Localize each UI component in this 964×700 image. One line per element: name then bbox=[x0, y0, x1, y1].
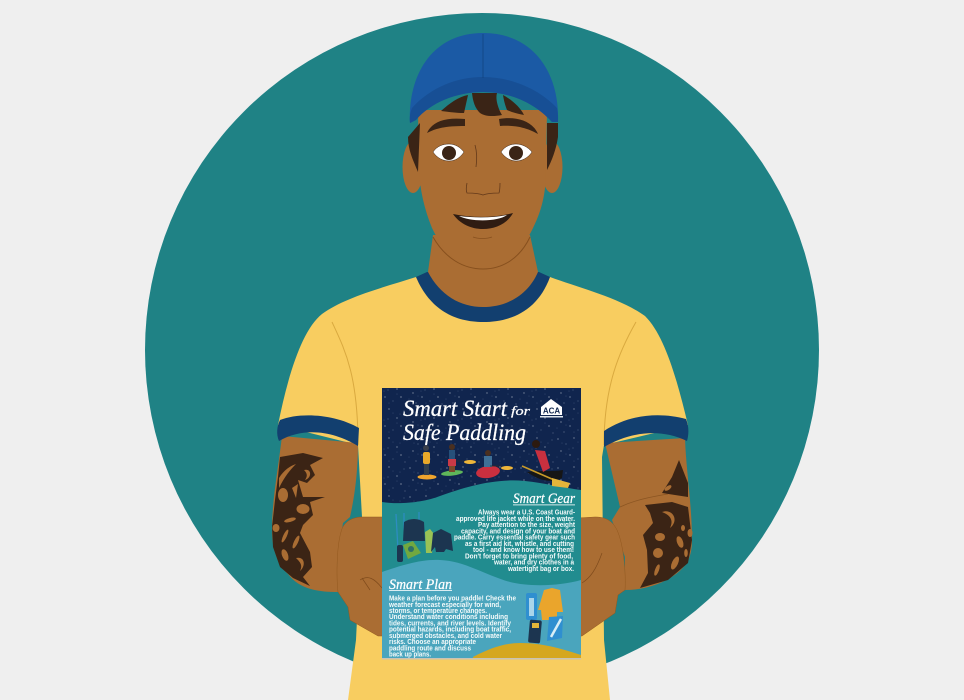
text: smart gear: as a first aid kit, whistle, and cutting bbox=[465, 541, 574, 548]
neck and collar bbox=[416, 235, 550, 322]
text: smart gear bbox=[454, 510, 576, 573]
text: smart plan: risks. Choose an appropriate bbox=[389, 639, 476, 646]
character bbox=[272, 33, 692, 700]
t-shirt bbox=[278, 277, 688, 700]
title: Safe Paddling bbox=[403, 420, 526, 445]
text: smart plan: back up plans. bbox=[389, 652, 431, 659]
smile bbox=[453, 213, 513, 238]
gear illustration bbox=[396, 512, 453, 562]
text: smart plan: Understand water conditions including bbox=[389, 614, 508, 621]
ACA logo bbox=[540, 399, 563, 418]
text: smart gear: Don't forget to bring plenty of food, bbox=[465, 553, 573, 560]
text: smart plan: submerged obstacles, and cold water bbox=[389, 633, 502, 640]
teal gear section bbox=[382, 480, 581, 590]
eyebrows bbox=[427, 118, 538, 134]
text: smart gear: approved life jacket while on the water. bbox=[456, 516, 575, 523]
text: smart plan bbox=[388, 596, 516, 659]
paddler: yellow board bbox=[418, 445, 436, 480]
text: smart plan: Make a plan before you paddle! Check the bbox=[389, 596, 516, 602]
blue plan section bbox=[382, 560, 581, 658]
text: smart plan: tides, currents, and river levels. Identify bbox=[389, 620, 511, 627]
nose bbox=[466, 145, 500, 195]
paddler: red kayak bbox=[475, 450, 513, 480]
head bbox=[418, 110, 547, 269]
text: smart plan: paddling route and discuss bbox=[389, 646, 471, 652]
right hand bbox=[578, 517, 625, 636]
plan gear illustration bbox=[526, 588, 563, 643]
text: smart gear: Pay attention to the size, weight bbox=[478, 522, 576, 529]
heading: smart plan: Smart Plan bbox=[389, 577, 452, 593]
text: smart plan: weather forecast especially for wind, bbox=[388, 602, 501, 609]
right arm bbox=[605, 438, 692, 590]
paddler: green board bbox=[441, 444, 476, 477]
text: smart gear: water, and dry clothes in a bbox=[493, 560, 574, 566]
left ear bbox=[402, 141, 424, 193]
paddler: yellow kayak bbox=[522, 440, 570, 488]
page edge bbox=[382, 658, 581, 660]
text: smart gear: capacity, and design of your boat and bbox=[461, 528, 575, 535]
eyes bbox=[433, 144, 532, 161]
text: smart gear: Always wear a U.S. Coast Guard- bbox=[478, 510, 576, 516]
title bbox=[403, 396, 531, 445]
ACA logo: ACA bbox=[543, 406, 560, 416]
text: smart gear: watertight bag or box. bbox=[507, 566, 574, 573]
left hand bbox=[337, 517, 384, 636]
leaflet starry navy header bbox=[382, 388, 581, 506]
leaflet bbox=[382, 388, 581, 660]
right ear bbox=[542, 141, 562, 193]
text: smart gear: tool - and know how to use them! bbox=[473, 547, 574, 554]
tattoo: right arm bbox=[640, 460, 692, 588]
text: smart gear: paddle. Carry essential safety gear such bbox=[454, 534, 575, 542]
left arm bbox=[272, 436, 358, 592]
teal background circle bbox=[145, 13, 819, 687]
text: smart plan: storms, or temperature changes. bbox=[389, 608, 487, 615]
hair bbox=[408, 93, 558, 172]
gold hill bbox=[473, 643, 581, 658]
heading: smart gear: Smart Gear bbox=[513, 491, 575, 507]
title: for bbox=[511, 403, 531, 418]
cap bbox=[410, 33, 558, 123]
sleeve cuffs bbox=[277, 415, 688, 447]
text: smart plan: potential hazards, including boat traffic, bbox=[389, 627, 511, 634]
tattoo: left arm bbox=[272, 453, 325, 586]
title: Smart Start bbox=[403, 396, 508, 421]
paddlers illustration bbox=[418, 440, 570, 488]
